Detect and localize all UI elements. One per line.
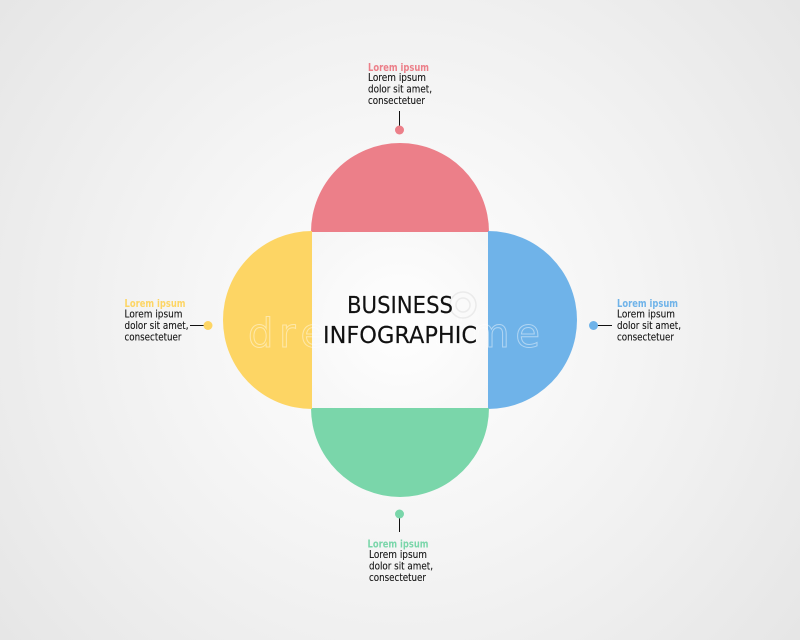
callout: top red: Lorem ipsum [368, 62, 429, 74]
callout: top red: consectetuer [368, 95, 426, 107]
callout: left yellow [124, 298, 212, 344]
callout: left yellow: Lorem ipsum [124, 308, 182, 320]
petal: yellow left [223, 231, 312, 409]
callout: right blue: consectetuer [617, 332, 675, 344]
callout: left yellow: Lorem ipsum [124, 298, 186, 310]
callout: top red: dolor sit amet, [368, 84, 432, 96]
heading: business infographic: BUSINESS [347, 293, 453, 319]
callout: top red: Lorem ipsum [368, 72, 426, 84]
callout: bottom green: consectetuer [369, 572, 427, 584]
callout: left yellow: consectetuer [124, 332, 182, 344]
petal: red top [311, 143, 489, 232]
petal: green bottom [311, 408, 489, 497]
callout: top red [368, 62, 432, 134]
petal: blue right [488, 231, 577, 409]
centre square [312, 232, 488, 408]
callout: right blue: Lorem ipsum [617, 298, 678, 310]
callout: bottom green [368, 510, 433, 584]
heading: business infographic [323, 293, 477, 349]
watermark: dreamstime [248, 311, 540, 357]
heading: business infographic: INFOGRAPHIC [323, 323, 477, 349]
callout: right blue: Lorem ipsum [617, 308, 675, 320]
diagram: four petals around a centre square [223, 143, 577, 497]
callout: right blue [589, 298, 681, 344]
callout: bottom green: dolor sit amet, [369, 560, 433, 572]
callout: left yellow: dolor sit amet, [124, 320, 188, 332]
callout: bottom green: Lorem ipsum [369, 549, 427, 561]
callout: right blue: dolor sit amet, [617, 320, 681, 332]
callout: bottom green: Lorem ipsum [368, 538, 429, 550]
